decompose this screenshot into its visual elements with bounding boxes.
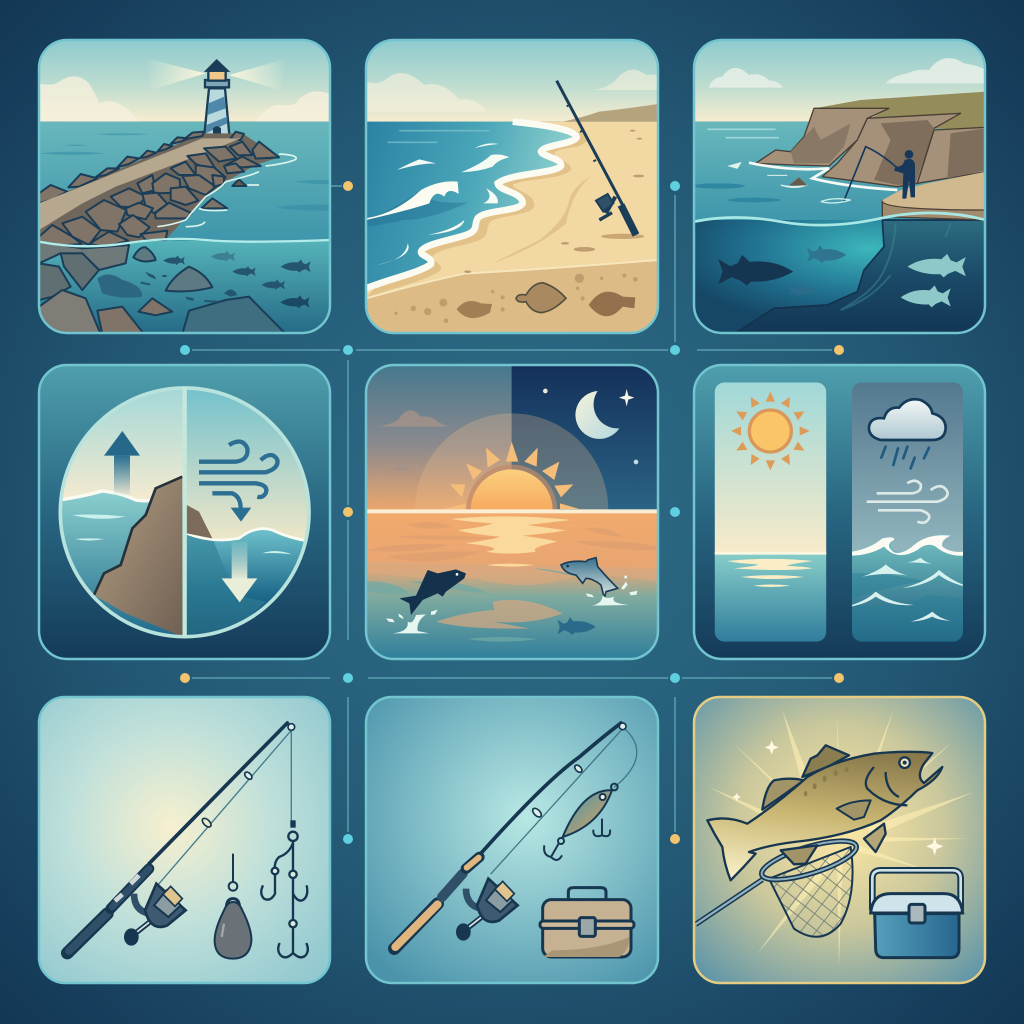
shadow fish xyxy=(557,617,596,635)
glow rays xyxy=(709,709,974,967)
jumping fish right xyxy=(561,558,618,598)
jetty rocks xyxy=(39,132,279,247)
wind xyxy=(199,442,278,522)
sand dots xyxy=(394,130,644,323)
headland xyxy=(756,92,986,187)
panel: rod with sinker and hooks xyxy=(39,697,331,984)
panel: tide diagram xyxy=(39,365,331,659)
sun rays xyxy=(444,442,579,509)
panel: rod with lure and tackle box xyxy=(366,697,658,984)
wave crests xyxy=(366,181,459,220)
lower sand band xyxy=(366,260,658,334)
arrow up xyxy=(104,431,140,497)
reel xyxy=(124,884,186,946)
panel: jetty and lighthouse xyxy=(39,40,331,334)
landing net xyxy=(696,833,860,937)
sparkles xyxy=(732,740,943,856)
panel: sunset and night xyxy=(366,365,658,659)
connector lines and nodes xyxy=(180,181,844,844)
small fish school xyxy=(141,251,311,308)
panel: sandy beach xyxy=(366,40,658,334)
splashes xyxy=(386,576,637,633)
sea xyxy=(366,122,577,288)
arrow down xyxy=(222,542,257,602)
hook rig xyxy=(261,820,308,957)
reel xyxy=(456,879,518,941)
icon: rain xyxy=(881,447,929,468)
sinker xyxy=(215,854,251,959)
cooler xyxy=(871,870,963,958)
icon: sun xyxy=(731,392,810,470)
fishing rod in sand xyxy=(557,81,644,239)
panel: cliffs xyxy=(693,40,986,334)
sun reflections xyxy=(451,516,571,567)
icon: wind xyxy=(867,481,948,523)
bass xyxy=(707,745,942,880)
angler xyxy=(844,147,915,201)
tackle box xyxy=(540,888,634,957)
flatfish xyxy=(457,283,635,318)
orange water bands xyxy=(366,562,658,629)
jumping fish left xyxy=(399,569,466,615)
fish spots xyxy=(804,767,849,796)
lure xyxy=(544,784,618,860)
panel: calm vs stormy xyxy=(694,365,986,659)
rock xyxy=(94,477,182,637)
underwater rocks xyxy=(39,242,286,334)
fish xyxy=(718,255,793,286)
fishing rod xyxy=(394,723,637,949)
foam xyxy=(157,154,296,227)
panel: caught fish, net and cooler xyxy=(694,697,986,984)
dark wet sand xyxy=(366,122,588,298)
crescent moon xyxy=(575,391,619,439)
deep water xyxy=(695,220,884,332)
ledge xyxy=(882,172,986,210)
lighthouse xyxy=(204,61,230,138)
fishing rod xyxy=(67,723,295,953)
icon: storm cloud xyxy=(869,399,946,440)
